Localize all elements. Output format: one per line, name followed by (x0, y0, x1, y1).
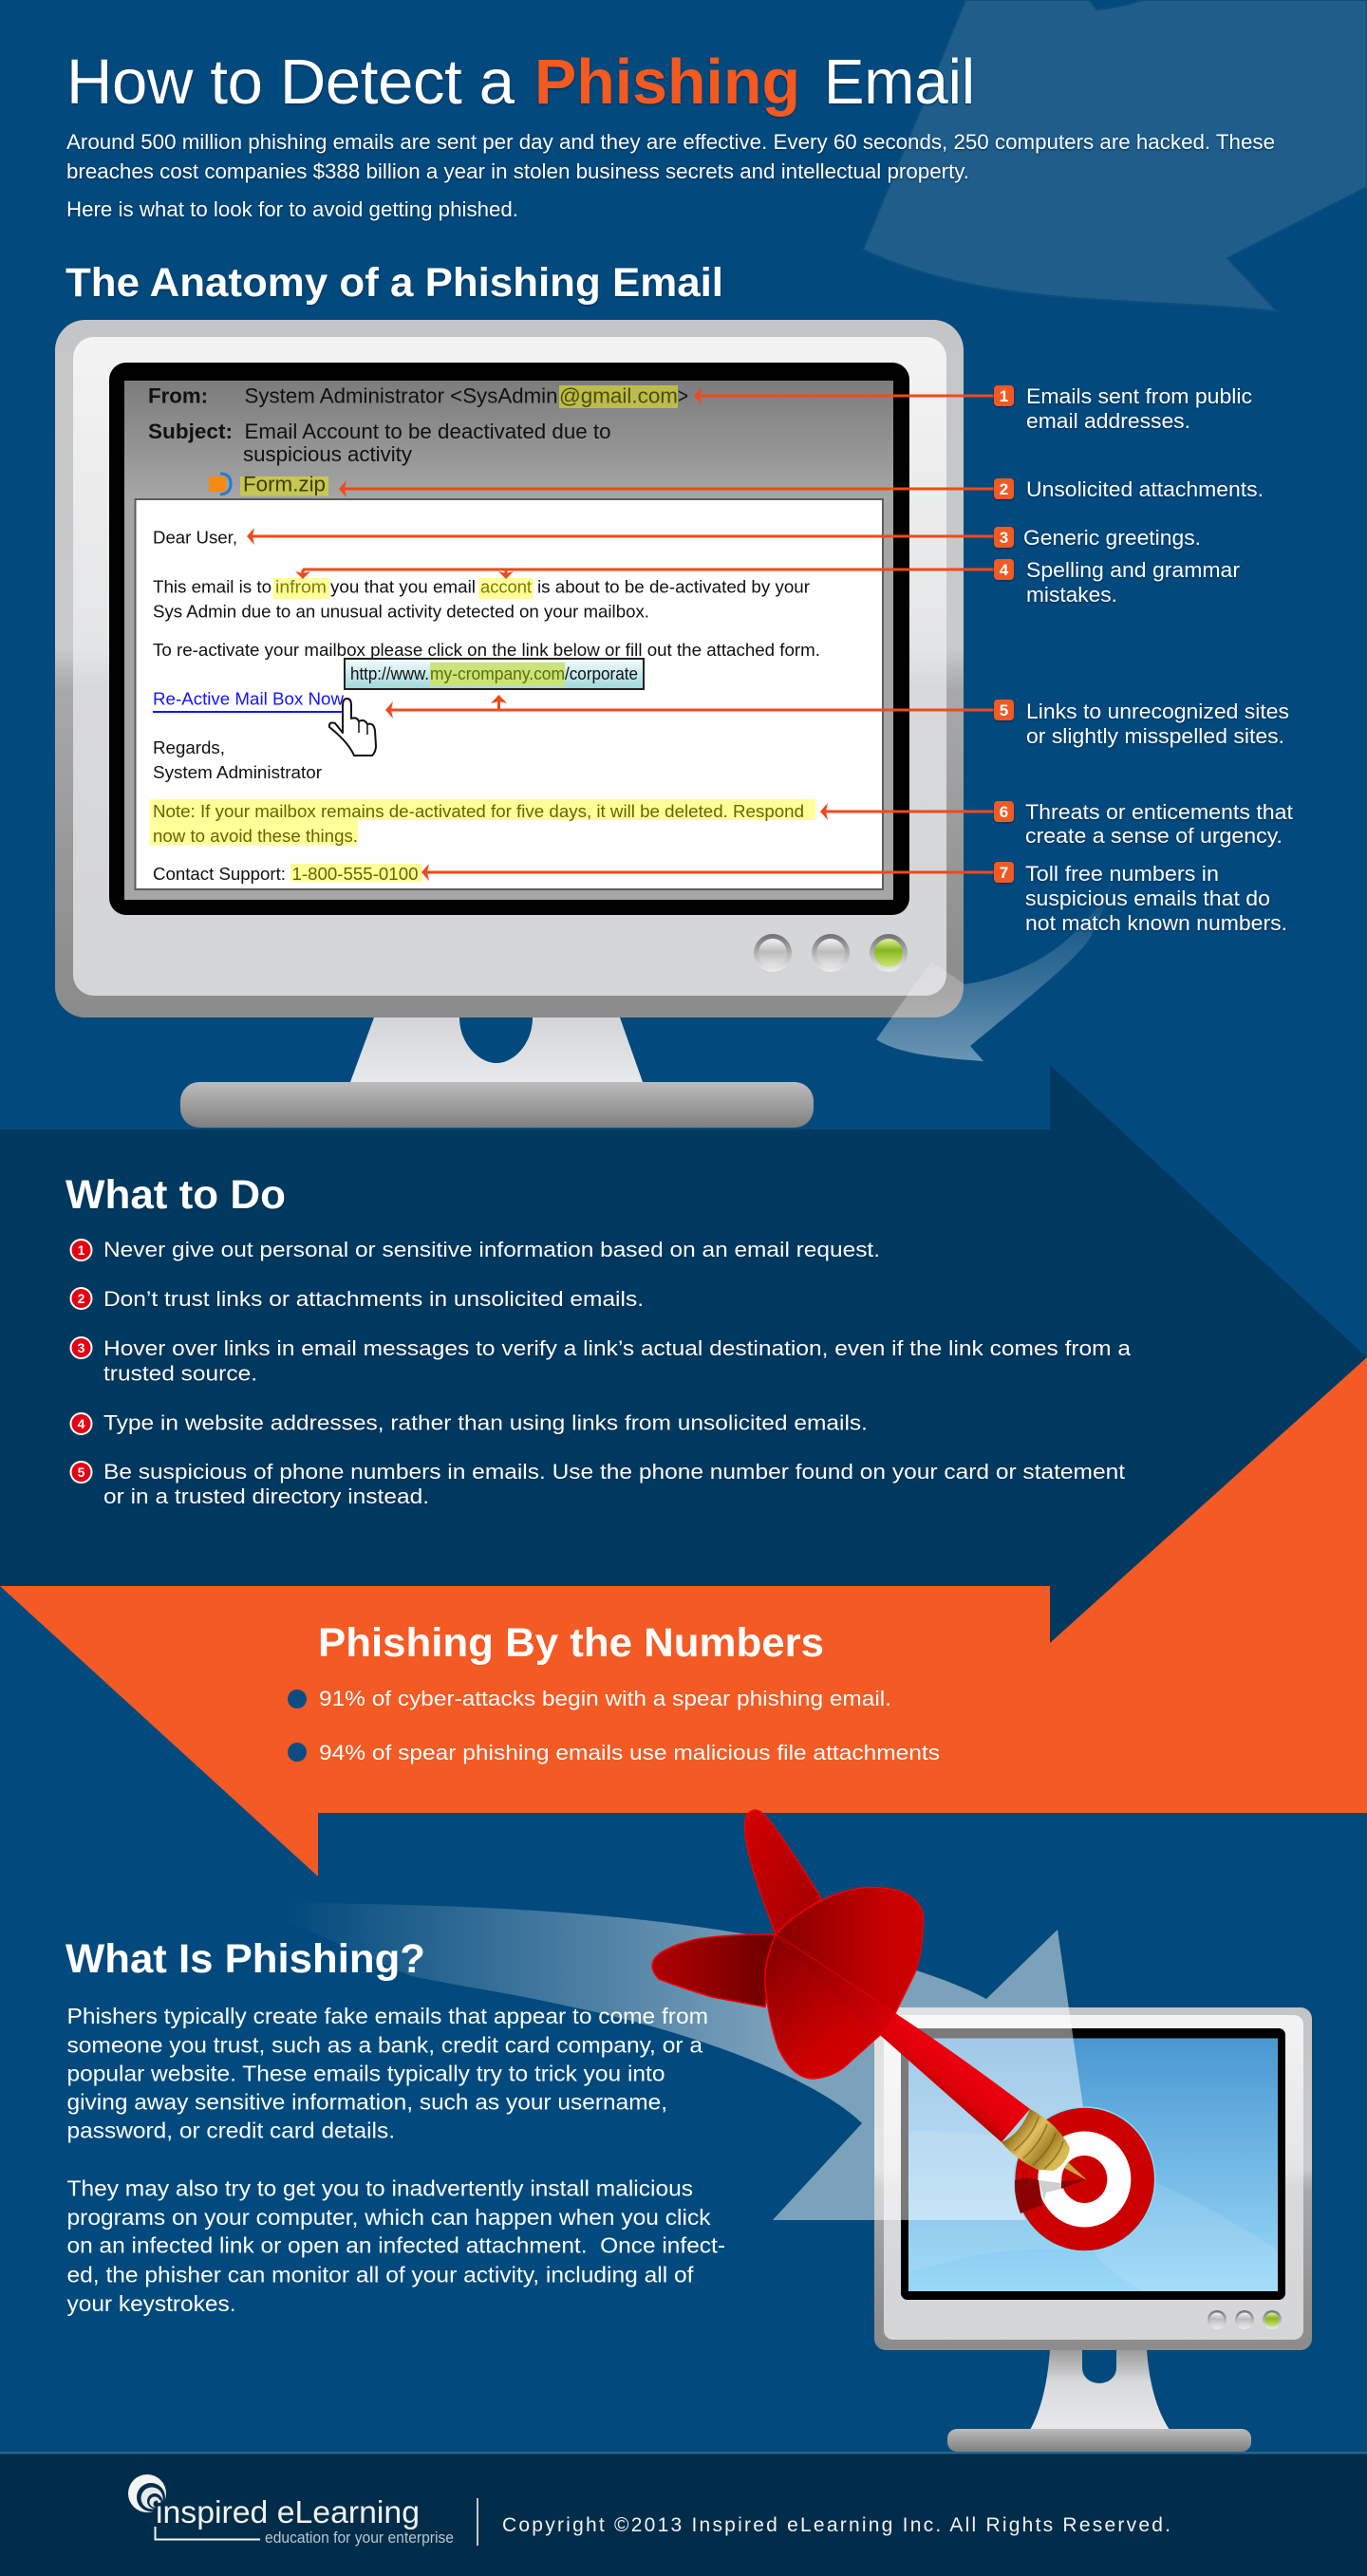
monitor stand notch (459, 1017, 533, 1063)
callout 5: Links to unrecognized sites (1026, 700, 1289, 723)
contact support line: 1-800-555-0100 (292, 864, 418, 884)
dart shaft (776, 1934, 1030, 2142)
item 3: Hover over links in email messages to verify a link’s actual destination, even if the link comes from a (103, 1336, 1132, 1360)
small monitor base (947, 2429, 1251, 2452)
monitor stand (350, 1017, 643, 1082)
monitor base (180, 1082, 814, 1128)
heading: What to Do: What to Do (66, 1172, 286, 1218)
email body text: To re-activate your mailbox please click on the link below or fill out the attached form. (153, 640, 820, 660)
logo wordmark: inspired eLearning (156, 2494, 420, 2529)
email body text: is about to be de-activated by your (537, 577, 810, 596)
callout 5: 5 (1000, 701, 1008, 719)
email body text: Regards, (153, 737, 225, 757)
panel: What to Do dark arrow (0, 1065, 1367, 1643)
small monitor with target (874, 2007, 1312, 2452)
arrow 6 (820, 803, 994, 820)
paragraph: what is phishing 1 (66, 2004, 708, 2143)
copyright: Copyright ©2013 Inspired eLearning Inc. All Rights Reserved. (502, 2514, 1170, 2536)
heading: Phishing By the Numbers: Phishing By the Numbers (318, 1620, 824, 1666)
title: Phishing (534, 47, 800, 118)
email from field (148, 383, 688, 408)
callout 2: Unsolicited attachments. (1026, 477, 1264, 501)
callout 5: or slightly misspelled sites. (1026, 724, 1284, 748)
monitor casing (55, 320, 964, 1017)
email from field: @gmail.com (559, 383, 678, 408)
item 5: 5 (78, 1465, 85, 1480)
dart point (1064, 2162, 1087, 2180)
email body panel (135, 499, 883, 889)
contact support line (153, 864, 422, 884)
dart flight left (652, 1934, 776, 2007)
email body text: infrom (275, 577, 327, 596)
red callout arrows (247, 387, 994, 881)
arrow 7 (421, 864, 994, 881)
item 5: or in a trusted directory instead. (103, 1484, 429, 1508)
threat note highlighted: now to avoid these things. (153, 826, 358, 846)
attachment file name: Form.zip (243, 473, 326, 495)
callout 7: 7 (1000, 864, 1008, 882)
translucent swoosh arrow to target (237, 1903, 1083, 2220)
intro paragraph: Here is what to look for to avoid getting phished. (66, 197, 518, 221)
link tooltip: my-crompany.com (430, 663, 565, 683)
arrow 3 (247, 528, 994, 545)
item 4: 4 (78, 1416, 85, 1431)
dart flight top (744, 1810, 821, 1934)
contact support line: Contact Support: (153, 864, 286, 884)
paragraph: what is phishing 2 (66, 2175, 725, 2316)
callout 1: 1 (1000, 387, 1008, 405)
item 2: 2 (78, 1291, 85, 1306)
callout 7: suspicious emails that do (1025, 887, 1270, 910)
callout 1 (994, 384, 1252, 433)
intro paragraph: Around 500 million phishing emails are sent per day and they are effective. Every 60 seconds, 250 computers are hacked. These (66, 130, 1275, 154)
icon: dart (652, 1810, 1087, 2180)
paragraph: what is phishing 2: ed, the phisher can monitor all of your activity, including all of (66, 2263, 694, 2287)
callout 6 (994, 800, 1293, 848)
footer (0, 2452, 1367, 2576)
email body text: This email is to (153, 577, 272, 596)
dart flight right (776, 1887, 923, 2013)
statistic 1: 91% of cyber-attacks begin with a spear phishing email. (319, 1687, 891, 1710)
item 5: Be suspicious of phone numbers in emails. Use the phone number found on your card or statement (103, 1460, 1125, 1484)
intro paragraph (66, 130, 1275, 221)
item 2: Don’t trust links or attachments in unsolicited emails. (103, 1287, 644, 1311)
email subject field: suspicious activity (243, 442, 412, 466)
logo wordmark (156, 2494, 454, 2547)
threat note highlighted (150, 799, 815, 846)
icon: hand cursor (329, 699, 376, 756)
monitor bezel (73, 337, 946, 996)
callout 4: Spelling and grammar (1026, 558, 1240, 582)
callout 5 (994, 700, 1289, 748)
arrow 2 (339, 480, 994, 497)
email body text: Dear User, (153, 528, 237, 547)
heading: What Is Phishing?: What Is Phishing? (66, 1936, 425, 1982)
paragraph: what is phishing 1: password, or credit card details. (66, 2119, 395, 2143)
email from field: > (678, 383, 688, 408)
icon: target (1015, 2107, 1155, 2251)
callout 7 (994, 862, 1287, 935)
email body text: you that you email (330, 577, 476, 596)
item 1: 1 (78, 1242, 85, 1258)
email body text: System Administrator (153, 762, 322, 782)
callout 1: Emails sent from public (1026, 384, 1252, 408)
item 3: 3 (78, 1340, 85, 1355)
paragraph: what is phishing 1: Phishers typically create fake emails that appear to come from (66, 2004, 708, 2028)
small monitor buttons (1208, 2310, 1282, 2329)
callout 7: Toll free numbers in (1025, 862, 1219, 886)
paragraph: what is phishing 1: popular website. These emails typically try to trick you into (66, 2062, 665, 2086)
link tooltip (345, 659, 644, 689)
callout 6: Threats or enticements that (1025, 800, 1293, 824)
callout 7: not match known numbers. (1025, 911, 1287, 935)
panel: Phishing By the Numbers orange arrow (0, 1357, 1367, 1876)
footer background (0, 2455, 1367, 2576)
paragraph: what is phishing 2: on an infected link or open an infected attachment. Once infect- (66, 2232, 725, 2257)
title: Email (824, 47, 975, 118)
monitor with phishing email (55, 320, 964, 1128)
arrow 1 (694, 387, 994, 404)
arrow 5 (385, 695, 994, 719)
curved translucent arrow beside monitor (876, 881, 1112, 1061)
email body text: Sys Admin due to an unusual activity detected on your mailbox. (153, 602, 649, 621)
small monitor bezel (884, 2015, 1303, 2340)
title: How to Detect a (66, 47, 515, 118)
monitor buttons (754, 934, 908, 972)
dart flight bottom (765, 1934, 880, 2079)
email body text: Re-Active Mail Box Now (153, 689, 345, 708)
item 3: trusted source. (103, 1361, 257, 1386)
background arrow: top right (863, 0, 1367, 311)
item 5 (70, 1460, 1125, 1508)
small monitor stand notch (1082, 2350, 1116, 2383)
title (66, 47, 975, 118)
monitor screen frame (109, 363, 909, 915)
email subject field: Email Account to be deactivated due to (245, 420, 611, 443)
callout 1: email addresses. (1026, 409, 1190, 433)
callout 6: create a sense of urgency. (1025, 824, 1283, 848)
what to do list (70, 1238, 1132, 1508)
heading: The Anatomy of a Phishing Email: The Anatomy of a Phishing Email (66, 260, 723, 306)
email body text: accont (480, 577, 532, 596)
email subject field (148, 420, 611, 466)
small monitor stand (1030, 2350, 1170, 2430)
item 4: Type in website addresses, rather than using links from unsolicited emails. (103, 1410, 868, 1435)
link tooltip: /corporate (565, 663, 638, 683)
small monitor casing (874, 2007, 1312, 2350)
icon: logo swirl (128, 2474, 166, 2512)
callout 3: Generic greetings. (1023, 526, 1201, 550)
paragraph: what is phishing 1: giving away sensitive information, such as your username, (66, 2090, 667, 2115)
callout 2: 2 (1000, 480, 1008, 498)
intro paragraph: breaches cost companies $388 billion a year in stolen business secrets and intellectual property. (66, 159, 969, 183)
callout 6: 6 (1000, 803, 1008, 821)
email from field: System Administrator <SysAdmin (245, 383, 558, 408)
small monitor screen (908, 2039, 1278, 2291)
icon: paperclip attachment (209, 474, 231, 495)
statistic 2: 94% of spear phishing emails use malicious file attachments (319, 1741, 940, 1764)
footer divider (477, 2498, 478, 2546)
dart barrel (1002, 2109, 1070, 2171)
email header area (124, 381, 893, 900)
logo wordmark: education for your enterprise (265, 2529, 454, 2547)
paragraph: what is phishing 2: programs on your computer, which can happen when you click (66, 2205, 711, 2230)
callout 4: 4 (1000, 561, 1009, 579)
arrow 4 (295, 569, 994, 579)
link tooltip: http://www. (350, 663, 429, 683)
email body text (153, 528, 820, 782)
callout 4 (994, 558, 1240, 607)
item 3 (70, 1336, 1132, 1386)
email subject field: Subject: (148, 420, 233, 443)
callout 3: 3 (1000, 529, 1008, 547)
paragraph: what is phishing 1: someone you trust, such as a bank, credit card company, or a (66, 2033, 702, 2058)
paragraph: what is phishing 2: They may also try to get you to inadvertently install malicious (66, 2175, 693, 2200)
email from field: From: (148, 383, 208, 408)
callout 4: mistakes. (1026, 583, 1117, 607)
small monitor frame (901, 2028, 1285, 2300)
paragraph: what is phishing 2: your keystrokes. (66, 2291, 235, 2316)
item 1: Never give out personal or sensitive information based on an email request. (103, 1238, 880, 1261)
threat note highlighted: Note: If your mailbox remains de-activated for five days, it will be deleted. Respond (153, 801, 804, 821)
screen swoosh (908, 2131, 1278, 2291)
